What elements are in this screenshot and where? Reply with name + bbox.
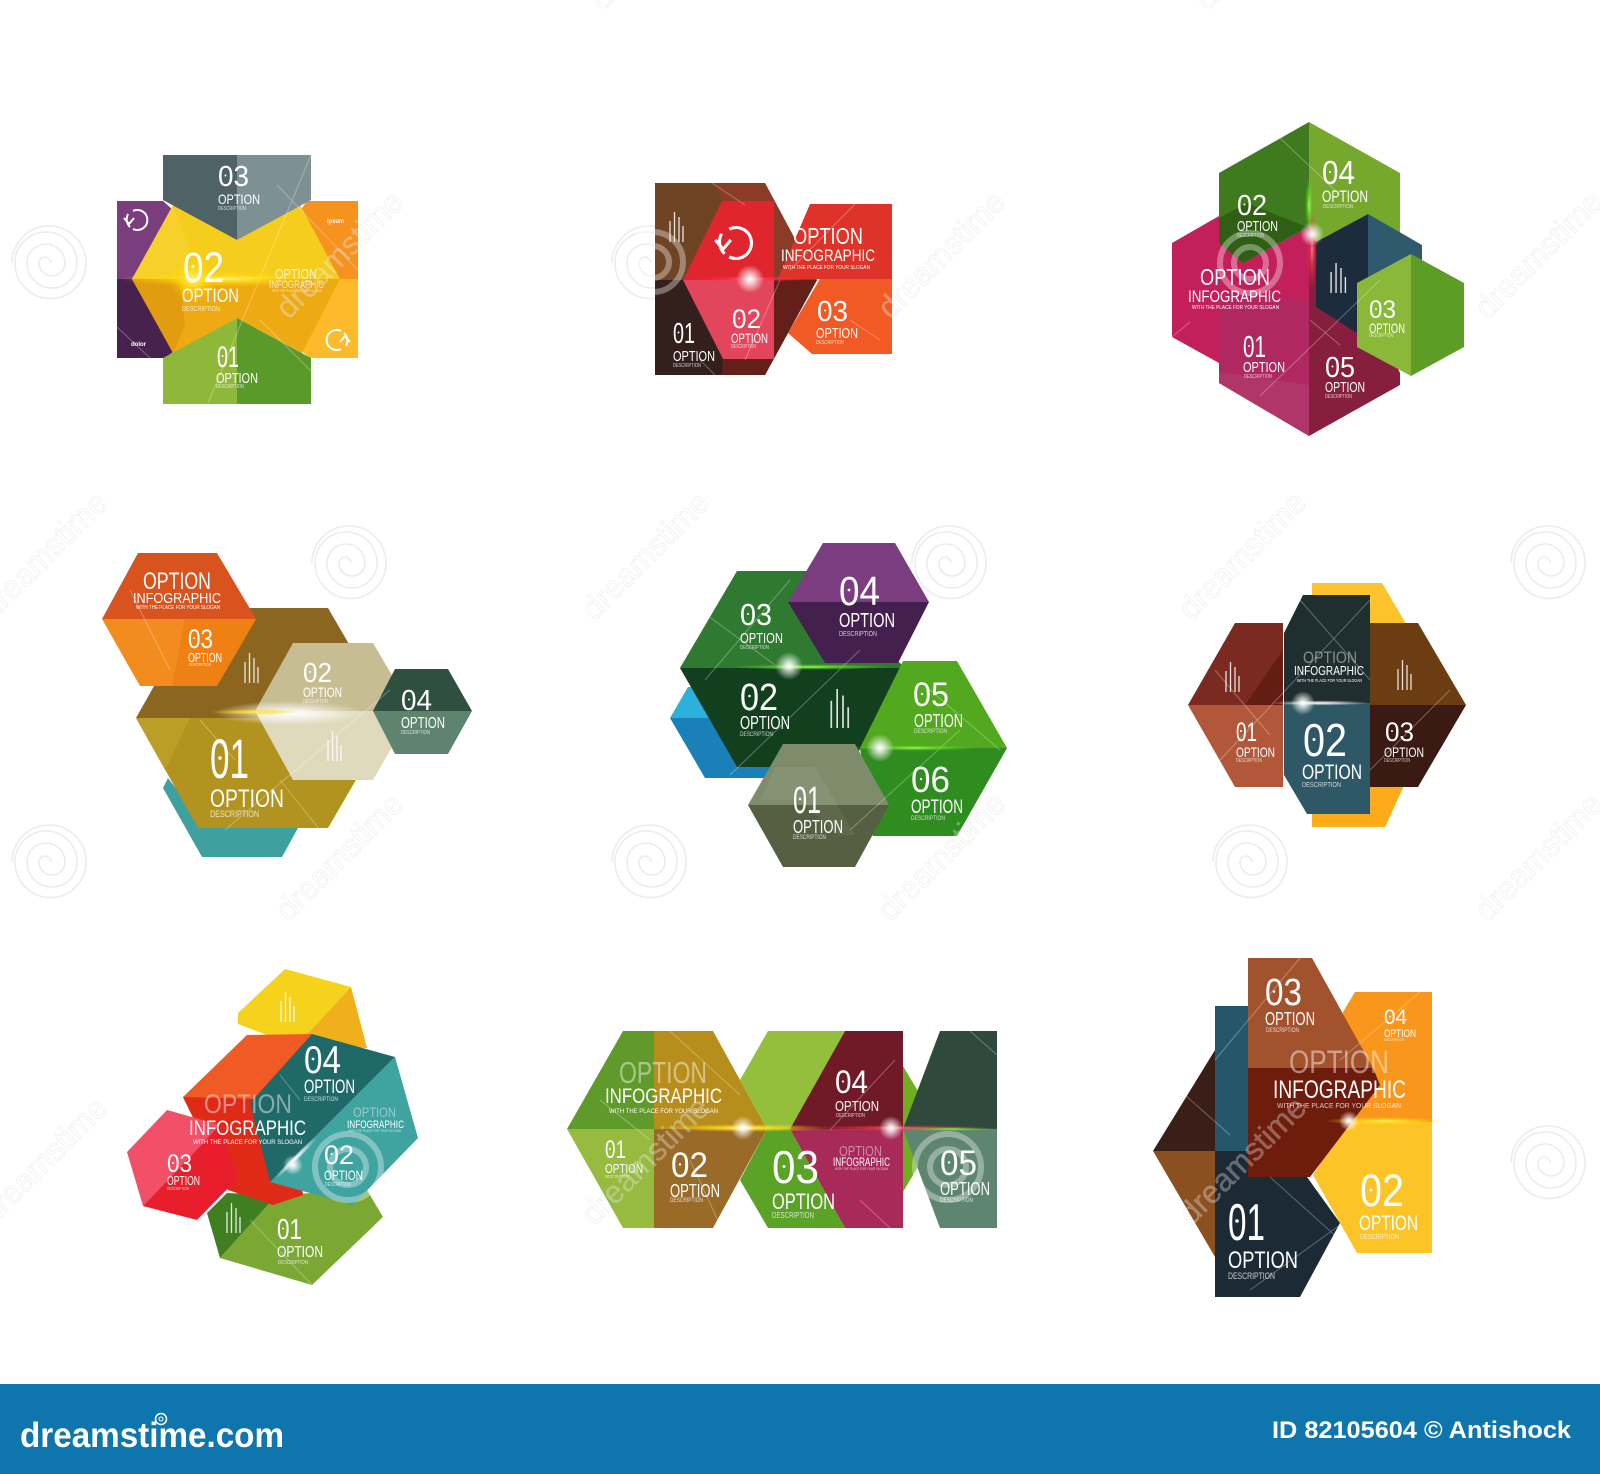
label 03 (1369, 296, 1405, 339)
label 01: 01 (1243, 329, 1266, 364)
label 04: OPTION (1384, 1028, 1416, 1040)
label 02: 02 (1237, 190, 1267, 222)
label 02 (303, 657, 342, 705)
label 02: 02 (1303, 714, 1347, 766)
watermark text: dreamstime (870, 785, 1012, 927)
label 02: DESCRIPTION (182, 306, 220, 313)
purple hexagon (788, 543, 929, 663)
label 01: 01 (210, 727, 249, 790)
label 02: 02 (740, 677, 778, 719)
label 01: 01 (673, 318, 695, 350)
watermark rings (915, 1134, 981, 1200)
brown left hexagon (1188, 623, 1283, 787)
glow (120, 255, 330, 303)
panel: amber hexagon cluster (102, 553, 472, 857)
glows (660, 1116, 1000, 1140)
yellow back shape (1312, 583, 1405, 827)
label 01: 01 (217, 341, 239, 374)
image id and credit: ID 82105604 © Antishock (1272, 1417, 1572, 1444)
label 03: DESCRIPTION (1384, 758, 1410, 764)
heading: INFOGRAPHIC (269, 279, 324, 291)
secondary heading: OPTION (353, 1104, 396, 1120)
label 02: OPTION (1359, 1212, 1418, 1235)
label 01: DESCRIPTION (1236, 758, 1262, 764)
panel: red hexagon infographic (623, 183, 892, 375)
watermark text: dreamstime (268, 785, 410, 927)
label 01: DESCRIPTION (793, 835, 826, 841)
label 01 (793, 780, 843, 841)
label 01: DESCRIPTION (278, 1260, 308, 1266)
label 04: OPTION (839, 610, 895, 632)
label 01 (1243, 329, 1285, 380)
heading: INFOGRAPHIC (133, 590, 221, 607)
label 05: 05 (940, 1144, 977, 1183)
background watermark spirals (12, 226, 1585, 1198)
label 01 (210, 727, 284, 819)
label 02 (731, 304, 768, 350)
label 03: 03 (1265, 972, 1302, 1014)
label 04: DESCRIPTION (401, 730, 430, 736)
watermark text: dreamstime (870, 183, 1012, 325)
tab words: dolor (131, 342, 147, 348)
watermark rings (1220, 233, 1280, 293)
label 04 (1384, 1006, 1416, 1042)
gold big hexagon (136, 608, 392, 828)
label 01 (277, 1214, 323, 1266)
secondary heading: WITH THE PLACE FOR YOUR SLOGAN (348, 1129, 401, 1133)
heading (1188, 264, 1281, 311)
glow (1300, 177, 1324, 290)
label 04: 04 (401, 685, 432, 717)
label 01: OPTION (1228, 1247, 1298, 1274)
label 02: DESCRIPTION (325, 1182, 351, 1188)
footer logo: dreamstime.com (20, 1416, 284, 1455)
watermark rings (623, 232, 683, 292)
label 04: 04 (1384, 1006, 1407, 1029)
panel: vertical dark and amber infographic (1188, 583, 1466, 827)
label 04: DESCRIPTION (1323, 204, 1353, 210)
panel: tilted hexagon cluster (127, 969, 418, 1285)
label 01: OPTION (277, 1244, 323, 1261)
label 01: OPTION (605, 1161, 643, 1176)
label 02 (1237, 190, 1278, 239)
label 02: DESCRIPTION (670, 1198, 703, 1204)
teal hexagon (163, 778, 298, 857)
label 03: 03 (740, 597, 772, 632)
label 03 (1384, 717, 1424, 764)
label 04: OPTION (835, 1098, 879, 1115)
label 02: 02 (732, 304, 761, 334)
red centre hexagon (683, 201, 774, 359)
label 04 (401, 685, 445, 736)
label 03: 03 (218, 161, 249, 193)
label 02: 02 (1360, 1165, 1404, 1216)
label 04: 04 (1322, 154, 1355, 191)
secondary heading: INFOGRAPHIC (833, 1155, 890, 1169)
heading: INFOGRAPHIC (1294, 663, 1364, 678)
label 05 (913, 676, 963, 735)
heading: INFOGRAPHIC (1188, 287, 1281, 306)
label 01: 01 (1228, 1194, 1265, 1252)
label 01: 01 (1236, 717, 1257, 747)
label 02: DESCRIPTION (303, 699, 328, 705)
yellow centre shape (132, 205, 340, 353)
icons: bars (245, 653, 341, 761)
label 05: 05 (1325, 352, 1355, 384)
label 05: OPTION (1325, 379, 1365, 396)
label 03 (740, 597, 783, 651)
label 03: DESCRIPTION (1369, 333, 1393, 339)
panel: horizontal band infographic (567, 1031, 1000, 1228)
heading: INFOGRAPHIC (189, 1117, 306, 1140)
label 01: DESCRIPTION (216, 384, 244, 390)
heading: INFOGRAPHIC (1273, 1076, 1406, 1104)
heading: OPTION (1303, 648, 1357, 667)
label 01: 01 (605, 1136, 626, 1164)
heading: WITH THE PLACE FOR YOUR SLOGAN (1277, 1101, 1401, 1110)
green top hexagon (1219, 122, 1400, 263)
label 04: OPTION (401, 715, 445, 732)
label 03: DESCRIPTION (1266, 1028, 1299, 1034)
label 04: OPTION (304, 1077, 355, 1098)
label 03: DESCRIPTION (816, 340, 844, 346)
label 01: DESCRIPTION (210, 809, 259, 819)
label 03: OPTION (1384, 744, 1424, 760)
heading: INFOGRAPHIC (605, 1085, 722, 1108)
orange right tab (297, 201, 358, 358)
label 01 (1236, 717, 1275, 764)
label 01: OPTION (793, 817, 843, 837)
label 01: OPTION (673, 348, 715, 365)
heading: OPTION (1289, 1044, 1389, 1080)
heading: INFOGRAPHIC (781, 246, 875, 265)
label 02: OPTION (303, 684, 342, 700)
beige hexagon (255, 643, 413, 780)
label 02 (1302, 714, 1362, 789)
label 05 (940, 1144, 990, 1204)
label 03: OPTION (167, 1173, 200, 1188)
label 02: DESCRIPTION (1360, 1234, 1399, 1241)
icon: cycle arrows (715, 228, 752, 258)
heading: OPTION (204, 1089, 292, 1119)
icon: cycle arrows left (124, 210, 147, 230)
label 01: 01 (277, 1214, 302, 1246)
panel: cross infographic (117, 155, 358, 404)
label 02 (670, 1146, 720, 1204)
heading (1294, 648, 1364, 683)
blue hexagon (670, 687, 790, 778)
glow (1270, 691, 1370, 715)
icon: bars (670, 212, 683, 242)
label 05: 05 (913, 676, 949, 714)
label 02 (324, 1140, 363, 1188)
heading: WITH THE PLACE FOR YOUR SLOGAN (136, 605, 220, 611)
heading (189, 1089, 306, 1146)
label 02 (740, 677, 790, 738)
orange hexagon (102, 553, 256, 686)
label 06: DESCRIPTION (911, 815, 945, 822)
label 02: DESCRIPTION (731, 344, 756, 350)
secondary heading (347, 1104, 404, 1133)
heading (781, 223, 875, 271)
heading: WITH THE PLACE FOR YOUR SLOGAN (1297, 678, 1362, 683)
label 03 (188, 624, 222, 667)
label 03 (1265, 972, 1315, 1034)
label 03: 03 (1369, 296, 1396, 324)
brown back hexagon (655, 183, 817, 375)
label 03: OPTION (1265, 1009, 1315, 1029)
label 02: OPTION (731, 330, 768, 346)
label 05 (1325, 352, 1365, 400)
label 04: DESCRIPTION (304, 1096, 338, 1103)
watermark text: dreamstime (574, 484, 716, 626)
dark green hexagon (680, 571, 905, 767)
label 03: 03 (1385, 717, 1414, 747)
label 03: OPTION (740, 630, 783, 647)
label 04 (1322, 154, 1368, 210)
heading (1273, 1044, 1406, 1110)
label 05: DESCRIPTION (914, 729, 947, 735)
label 01 (1228, 1194, 1298, 1281)
bright green hexagon (860, 661, 1007, 836)
brown top block (1248, 958, 1380, 1177)
pink tilted hexagon (127, 1110, 238, 1220)
glow (690, 265, 810, 293)
heading: WITH THE PLACE FOR YOUR SLOGAN (609, 1108, 718, 1115)
watermark text: dreamstime (268, 183, 410, 325)
label 03: OPTION (188, 650, 222, 665)
label 04: 04 (835, 1064, 868, 1100)
green bottom tab (163, 318, 311, 404)
watermark text: dreamstime (574, 1089, 716, 1231)
teal tilted hexagon (250, 1034, 418, 1205)
icons: bars (227, 992, 294, 1233)
glow (272, 1135, 319, 1181)
label 06 (911, 759, 963, 822)
label 01 (673, 318, 715, 369)
label 04: OPTION (1322, 187, 1368, 206)
label 01: OPTION (216, 370, 258, 387)
label 01: OPTION (1243, 359, 1285, 376)
label 01: DESCRIPTION (1244, 374, 1272, 380)
brown right hexagon (1370, 623, 1466, 787)
orange red right block (778, 204, 892, 354)
navy column (1215, 1006, 1340, 1297)
dark green hexagon (903, 1031, 997, 1228)
label 02: OPTION (1302, 761, 1362, 784)
heading: WITH THE PLACE FOR YOUR SLOGAN (272, 289, 322, 293)
heading (605, 1055, 722, 1115)
glows (730, 652, 980, 762)
heading: WITH THE PLACE FOR YOUR SLOGAN (193, 1139, 302, 1146)
label 03: DESCRIPTION (218, 206, 246, 212)
purple left tab (117, 201, 173, 358)
heading: OPTION (275, 266, 317, 283)
label 06: OPTION (911, 797, 963, 818)
label 06: 06 (911, 759, 950, 800)
label 04: DESCRIPTION (836, 1113, 865, 1119)
watermark text: dreamstime (1171, 484, 1313, 626)
secondary heading: OPTION (839, 1143, 882, 1160)
label 02: 02 (183, 244, 224, 292)
heading: WITH THE PLACE FOR YOUR SLOGAN (1192, 305, 1279, 311)
label 03 (218, 161, 260, 212)
label 02: OPTION (1237, 218, 1278, 235)
green tilted hexagon (207, 1190, 383, 1285)
label 01: DESCRIPTION (605, 1174, 629, 1179)
label 02: OPTION (740, 713, 790, 733)
yellow right block (1313, 1122, 1432, 1253)
label 02: DESCRIPTION (1237, 233, 1264, 239)
label 02: OPTION (324, 1167, 363, 1183)
heading (269, 266, 324, 293)
label 01: OPTION (1236, 744, 1275, 760)
icon: bars (1331, 263, 1345, 293)
label 03: DESCRIPTION (167, 1186, 189, 1191)
label 04: 04 (839, 568, 880, 614)
secondary heading (833, 1143, 890, 1171)
navy centre column (1284, 595, 1370, 814)
label 03: OPTION (816, 325, 858, 342)
watermark rings (315, 1134, 381, 1200)
label 03: DESCRIPTION (740, 645, 769, 651)
heading: OPTION (1200, 264, 1270, 290)
label 02 (182, 244, 239, 313)
heading: OPTION (619, 1055, 707, 1090)
dark green small hexagon (373, 669, 472, 754)
label 04: 04 (304, 1039, 341, 1082)
label 03: OPTION (772, 1189, 835, 1214)
label 02 (1359, 1165, 1418, 1241)
label 04 (835, 1064, 879, 1119)
label 01 (216, 341, 258, 390)
panel: green and purple hexagon cluster (670, 543, 1007, 867)
label 03: 03 (167, 1150, 192, 1178)
left dark hexagon (1153, 1050, 1215, 1257)
orange tilted hexagon (183, 1034, 312, 1205)
label 02: OPTION (182, 286, 239, 307)
panel: tall brown and orange infographic (1153, 958, 1445, 1297)
pink left hexagon (1172, 165, 1309, 436)
label 01: 01 (793, 780, 821, 822)
maroon and pink block (790, 1031, 903, 1228)
heading: WITH THE PLACE FOR YOUR SLOGAN (783, 265, 870, 271)
footer bar (0, 1384, 1600, 1474)
label 03 (816, 296, 858, 346)
label 02: OPTION (670, 1181, 720, 1201)
label 03: 03 (188, 624, 213, 654)
heading: OPTION (793, 223, 863, 249)
heading: OPTION (143, 568, 211, 595)
tab words: ipsum (327, 219, 344, 225)
label 03 (772, 1141, 835, 1220)
label 03: 03 (772, 1141, 819, 1193)
label 01 (605, 1136, 643, 1179)
secondary heading: INFOGRAPHIC (347, 1119, 404, 1131)
label 03: 03 (817, 296, 848, 328)
label 03: DESCRIPTION (772, 1211, 814, 1220)
maroon lower right (1309, 227, 1400, 436)
yellow tilted hexagon (238, 969, 367, 1048)
label 03: DESCRIPTION (189, 662, 211, 667)
glow (210, 701, 365, 725)
panel: pink and green hexagon cluster (1172, 122, 1464, 436)
label 03 (167, 1150, 200, 1191)
label 01: DESCRIPTION (673, 363, 701, 369)
label 01: OPTION (210, 785, 284, 813)
grey top tab (163, 155, 311, 240)
olive hexagon (748, 744, 889, 867)
orange right block (1343, 992, 1432, 1122)
icon: cycle arrows right (327, 330, 350, 350)
label 05: OPTION (914, 711, 963, 731)
icons: bars (1226, 660, 1411, 692)
label 02: 02 (303, 657, 332, 688)
label 04 (839, 568, 895, 638)
label 04 (304, 1039, 355, 1103)
label 03: OPTION (218, 191, 260, 207)
green hexagon (740, 1031, 845, 1228)
label 02: 02 (671, 1146, 708, 1185)
label 02: 02 (324, 1140, 354, 1170)
navy hexagon (1316, 214, 1422, 340)
first hexagon (567, 1031, 767, 1228)
tab words (131, 219, 344, 348)
label 04: DESCRIPTION (839, 631, 877, 638)
label 05: DESCRIPTION (1325, 394, 1352, 400)
label 01: DESCRIPTION (1228, 1271, 1275, 1281)
watermark text: dreamstime (1171, 1089, 1313, 1231)
small green back shape (903, 1066, 922, 1192)
secondary heading: WITH THE PLACE FOR YOUR SLOGAN (835, 1167, 888, 1171)
label 04: DESCRIPTION (1384, 1037, 1404, 1042)
heading (133, 568, 221, 611)
label 05: OPTION (940, 1179, 990, 1199)
glow (1325, 1111, 1445, 1131)
label 02: DESCRIPTION (1302, 782, 1341, 789)
green right hexagon (1357, 254, 1464, 376)
icon: bars (831, 689, 848, 728)
label 02: DESCRIPTION (740, 732, 773, 738)
label 03: OPTION (1369, 320, 1405, 336)
label 05: DESCRIPTION (940, 1198, 973, 1204)
